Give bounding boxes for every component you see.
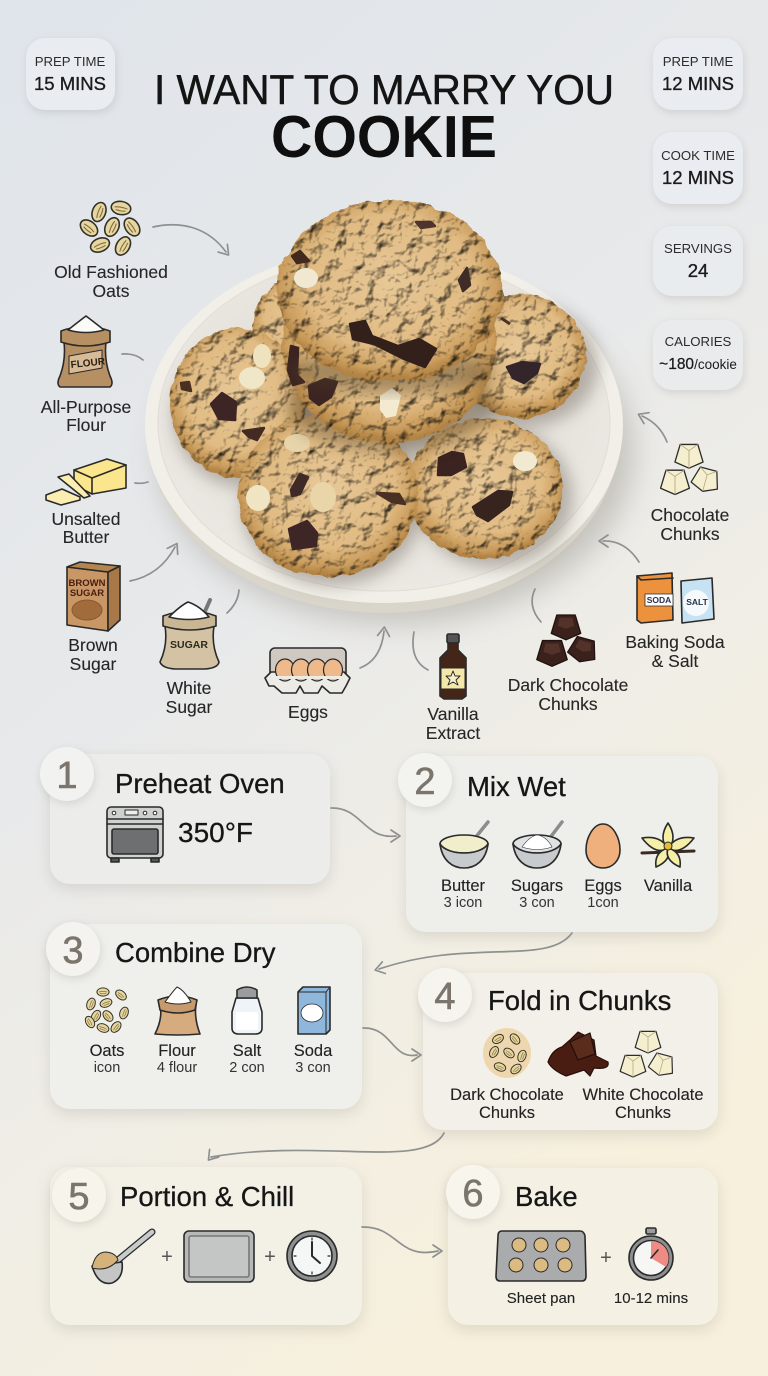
arrow: white sugar to plate xyxy=(227,590,239,613)
ingredient: dark chocolate chunks: Dark Chocolate xyxy=(508,675,628,695)
ingredient: butter: Unsalted xyxy=(51,509,121,529)
shadow under stacked cookies xyxy=(286,359,494,451)
step 1: preheat oven: Preheat Oven xyxy=(115,768,285,799)
cookie: bottom left xyxy=(238,413,418,577)
step 2: mix wet: Mix Wet xyxy=(467,771,566,802)
step 6: bake xyxy=(446,1165,718,1325)
badge: prep time left: 15 MINS xyxy=(34,73,106,94)
step 5: portion and chill xyxy=(50,1167,362,1325)
arrow: oats to plate xyxy=(153,225,233,259)
ingredient: vanilla extract xyxy=(426,634,480,743)
arrow: butter to plate xyxy=(135,482,148,483)
ingredient: butter: Butter xyxy=(63,527,110,547)
arrow: white chocolate to plate xyxy=(636,409,667,442)
ingredient: eggs xyxy=(265,648,350,722)
step 6: bake: Sheet pan xyxy=(507,1290,575,1307)
shadow under top cookie xyxy=(288,352,496,392)
icon: flour bag xyxy=(155,987,200,1035)
icon: oat cookie xyxy=(483,1028,531,1078)
step 3: combine dry: 4 flour xyxy=(157,1060,197,1076)
step number 2: 2 xyxy=(414,761,436,803)
step 6: bake: 10-12 mins xyxy=(614,1290,688,1307)
plate of cookies xyxy=(145,200,634,624)
icon: egg xyxy=(586,824,620,868)
cookie: left xyxy=(170,328,306,478)
step 2: mix wet: 3 icon xyxy=(444,895,482,911)
ingredient: butter xyxy=(46,459,126,547)
badge: prep time right xyxy=(653,38,743,110)
ingredient: baking soda and salt: & Salt xyxy=(652,651,698,671)
icon: white chocolate pieces xyxy=(661,444,722,495)
step number 4 xyxy=(418,968,472,1022)
step 2: mix wet: Butter xyxy=(441,877,486,895)
ingredient: old fashioned oats: Old Fashioned xyxy=(54,262,168,282)
step 4: fold in chunks xyxy=(418,968,718,1130)
arrow: soda to plate xyxy=(599,535,639,562)
arrow: step 2 to 3 xyxy=(374,933,572,976)
title xyxy=(154,66,614,170)
step 2: mix wet: 3 con xyxy=(519,895,555,911)
icon: brown sugar box: BROWN xyxy=(69,578,106,589)
ingredient: dark chocolate chunks xyxy=(508,615,628,714)
step 2: mix wet xyxy=(398,753,718,932)
ingredient: baking soda and salt xyxy=(625,573,725,671)
badge: servings: 24 xyxy=(688,260,708,281)
step 4: fold in chunks: White Chocolate xyxy=(582,1086,704,1104)
ingredient: white sugar: Sugar xyxy=(166,697,213,717)
step 3: combine dry: Flour xyxy=(158,1042,196,1060)
ingredient: white chocolate chunks: Chocolate xyxy=(651,505,729,525)
icon: vanilla flower xyxy=(642,823,694,867)
icon: white chunks xyxy=(620,1031,676,1079)
icon: soda box xyxy=(298,987,330,1034)
step 2: mix wet: Eggs xyxy=(584,877,622,895)
ingredient: white sugar: White xyxy=(167,678,211,698)
card 2 panel xyxy=(406,756,718,932)
arrow: eggs to plate xyxy=(360,626,390,668)
arrow: step 1 to 2 xyxy=(331,808,400,842)
icon: butter bowl xyxy=(440,822,488,868)
icon: sugar bowl xyxy=(513,822,562,868)
ingredient: vanilla extract: Extract xyxy=(426,723,480,743)
step 1: preheat oven xyxy=(40,747,330,884)
cookie shadows xyxy=(173,305,598,586)
icon: oats xyxy=(77,200,143,258)
title: COOKIE xyxy=(271,104,497,170)
ingredient: brown sugar: Sugar xyxy=(70,654,117,674)
badge: prep time left: PREP TIME xyxy=(35,54,105,69)
badge: servings: SERVINGS xyxy=(664,241,732,256)
icon: cookie scoop xyxy=(92,1232,152,1283)
ingredient: flour: Flour xyxy=(66,415,106,435)
step 3: combine dry: 3 con xyxy=(295,1060,331,1076)
icon: melted chocolate xyxy=(548,1032,608,1076)
icon: oven xyxy=(107,807,163,862)
ingredient: flour xyxy=(41,316,131,435)
step number 2 xyxy=(398,753,452,807)
arrow: dark chocolate to plate xyxy=(532,589,541,622)
arrow: step 5 to 6 xyxy=(362,1227,442,1257)
badge: cook time: 12 MINS xyxy=(662,167,734,188)
step 2: mix wet: 1con xyxy=(587,895,619,911)
icon: butter block xyxy=(46,459,126,505)
step number 3: 3 xyxy=(62,930,84,972)
step 6: bake: + xyxy=(600,1247,612,1269)
icon: soda and salt boxes: SODA xyxy=(647,595,671,605)
cookie: bottom right xyxy=(407,419,563,559)
ingredient: white sugar xyxy=(160,600,219,717)
step number 3 xyxy=(46,922,100,976)
ingredient: white chocolate chunks xyxy=(651,444,729,544)
step number 4: 4 xyxy=(434,976,456,1018)
icon: flour sack: FLOUR xyxy=(70,356,106,371)
icon: salt shaker xyxy=(232,987,262,1034)
step number 1: 1 xyxy=(56,755,78,797)
step 4: fold in chunks: Chunks xyxy=(479,1104,535,1122)
step 3: combine dry: Combine Dry xyxy=(115,937,276,968)
icon: soda and salt boxes xyxy=(637,573,714,623)
card 3 panel xyxy=(50,924,362,1109)
arrow: flour to plate xyxy=(122,354,143,360)
plate xyxy=(145,247,634,624)
badge: prep time right: PREP TIME xyxy=(663,54,733,69)
cookie: top stacked xyxy=(277,200,503,382)
cookie: back right xyxy=(454,294,586,418)
card 1 panel xyxy=(50,754,330,884)
icon: soda and salt boxes: SALT xyxy=(686,597,709,607)
icon: clock xyxy=(287,1231,337,1281)
step 4: fold in chunks: Fold in Chunks xyxy=(488,985,671,1016)
step number 6 xyxy=(446,1165,500,1219)
cookie: lower stacked xyxy=(282,245,496,443)
badge: calories: ~180/cookie xyxy=(659,356,737,373)
cookie: back small xyxy=(253,279,337,371)
step 6: bake: Bake xyxy=(515,1181,578,1212)
badge: calories xyxy=(653,320,743,390)
icon: brown sugar box xyxy=(67,562,120,631)
ingredient: white chocolate chunks: Chunks xyxy=(660,524,720,544)
icon: tray xyxy=(184,1231,254,1282)
badge: calories: CALORIES xyxy=(665,334,732,349)
ingredient: eggs: Eggs xyxy=(288,702,328,722)
step 1: preheat oven: 350°F xyxy=(178,817,253,848)
icon: brown sugar box: SUGAR xyxy=(70,588,104,599)
step 5: portion and chill: Portion & Chill xyxy=(120,1181,294,1212)
ingredient: old fashioned oats xyxy=(54,200,168,301)
arrow: vanilla to plate xyxy=(413,632,428,670)
icon: sugar sack: SUGAR xyxy=(170,639,208,651)
ingredient: brown sugar: Brown xyxy=(68,635,118,655)
icon: oats pile xyxy=(83,988,130,1034)
step 3: combine dry: icon xyxy=(94,1060,120,1076)
step 3: combine dry: 2 con xyxy=(229,1060,265,1076)
icon: sheet pan xyxy=(496,1231,586,1281)
step 2: mix wet: Vanilla xyxy=(644,877,693,895)
card 5 panel xyxy=(50,1167,362,1325)
step 4: fold in chunks: Dark Chocolate xyxy=(450,1086,564,1104)
ingredient: old fashioned oats: Oats xyxy=(93,281,130,301)
step 4: fold in chunks: Chunks xyxy=(615,1104,671,1122)
step 2: mix wet: Sugars xyxy=(511,877,563,895)
ingredient: dark chocolate chunks: Chunks xyxy=(538,694,598,714)
icon: stopwatch xyxy=(629,1228,673,1280)
badge: prep time right: 12 MINS xyxy=(662,73,734,94)
card 4 panel xyxy=(423,973,718,1130)
badge: servings xyxy=(653,226,743,296)
step 5: portion and chill: + xyxy=(161,1246,173,1268)
step 5: portion and chill: + xyxy=(264,1246,276,1268)
ingredient: brown sugar xyxy=(67,562,120,674)
ingredient: flour: All-Purpose xyxy=(41,397,131,417)
ingredient: vanilla extract: Vanilla xyxy=(427,704,479,724)
step 3: combine dry: Oats xyxy=(90,1042,124,1060)
step number 6: 6 xyxy=(462,1173,484,1215)
step 3: combine dry: Soda xyxy=(294,1042,333,1060)
icon: egg carton xyxy=(265,648,350,693)
step number 1 xyxy=(40,747,94,801)
badge: cook time xyxy=(653,132,743,204)
step number 5: 5 xyxy=(68,1176,90,1218)
step 3: combine dry: Salt xyxy=(233,1042,262,1060)
ingredient: baking soda and salt: Baking Soda xyxy=(625,632,725,652)
title: I WANT TO MARRY YOU xyxy=(154,66,614,113)
icon: vanilla bottle xyxy=(440,634,466,699)
arrow: step 3 to 4 xyxy=(363,1028,421,1061)
arrow: brown sugar to plate xyxy=(130,541,182,581)
badge: prep time left xyxy=(26,38,115,110)
card 6 panel xyxy=(448,1168,718,1325)
arrow: step 4 to 5 xyxy=(204,1133,444,1164)
step number 5 xyxy=(52,1168,106,1222)
badge: cook time: COOK TIME xyxy=(661,148,735,163)
icon: dark chocolate pieces xyxy=(537,615,599,666)
step 3: combine dry xyxy=(46,922,362,1109)
